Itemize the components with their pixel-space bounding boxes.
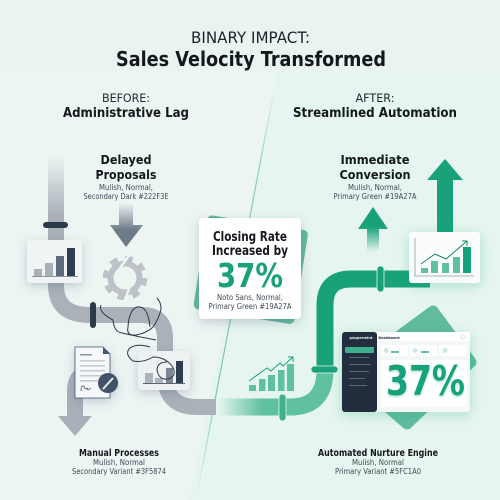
- text: delayed proposals: Secondary Dark #222F3E: [84, 192, 169, 201]
- dashboard: [342, 332, 470, 412]
- chart card upper left: [27, 240, 82, 283]
- callout: closing rate: Increased by: [212, 243, 288, 259]
- text: immediate conversion: Conversion: [340, 167, 410, 182]
- icon: broken gear: [106, 254, 144, 302]
- text: delayed proposals: Mulish, Normal,: [99, 183, 153, 192]
- title: BINARY IMPACT:: [191, 28, 310, 47]
- callout: closing rate: Primary Green #19A27A: [208, 302, 292, 311]
- text: delayed proposals: Delayed: [100, 152, 152, 167]
- text: immediate conversion: [334, 152, 417, 201]
- text: automated nurture engine: Primary Variant #5FC1A0: [335, 467, 421, 476]
- pipe clamp middle: [90, 302, 96, 328]
- icon: signed document: [75, 347, 118, 398]
- text: manual processes: Mulish, Normal: [93, 458, 145, 467]
- text: immediate conversion: Immediate: [340, 152, 410, 167]
- text: delayed proposals: Proposals: [96, 167, 156, 182]
- text: manual processes: Manual Processes: [79, 448, 159, 459]
- title: Sales Velocity Transformed: [116, 47, 386, 71]
- text: automated nurture engine: [318, 448, 438, 476]
- pipe clamp upper: [43, 222, 68, 228]
- text: immediate conversion: Primary Green #19A27A: [334, 192, 417, 201]
- dashboard header: Dashboard: [378, 336, 400, 340]
- arrow: up small: [358, 207, 388, 252]
- before pipe: [43, 155, 216, 407]
- pipe clamps: [279, 266, 384, 421]
- chart card upper right: [409, 232, 480, 283]
- arrow: up large: [427, 159, 463, 235]
- title: [116, 28, 386, 71]
- callout: closing rate: 37%: [217, 256, 283, 295]
- heading: after: Streamlined Automation: [293, 106, 457, 121]
- text: automated nurture engine: Mulish, Normal: [352, 458, 404, 467]
- text: automated nurture engine: Automated Nurture Engine: [318, 448, 438, 459]
- after pipe: [218, 266, 430, 421]
- heading: before: Administrative Lag: [63, 106, 189, 121]
- text: manual processes: [72, 448, 166, 476]
- dashboard big number: 37%: [386, 357, 465, 405]
- heading: after: [293, 91, 457, 121]
- callout: closing rate: Closing Rate: [213, 229, 287, 245]
- heading: before: [63, 91, 189, 121]
- chart card lower left: [138, 351, 190, 390]
- diamond behind dashboard: [349, 311, 471, 424]
- callout: closing rate: [193, 215, 309, 325]
- text: delayed proposals: [84, 152, 169, 201]
- text: immediate conversion: Mulish, Normal,: [348, 183, 402, 192]
- divider line: [196, 85, 275, 500]
- arrow: down to manual processes: [58, 365, 110, 436]
- callout: closing rate: Noto Sans, Normal,: [217, 293, 283, 302]
- heading: after: AFTER:: [356, 91, 394, 105]
- arrow: down into gear: [110, 203, 143, 247]
- heading: before: BEFORE:: [102, 91, 150, 105]
- dashboard main panel: [381, 360, 467, 407]
- icon: pen badge: [98, 373, 118, 393]
- mini growth chart: [249, 357, 294, 391]
- dashboard sidebar: peppermint: [349, 336, 373, 340]
- tangled wires: [100, 298, 174, 379]
- dashboard stat cards: [381, 345, 467, 356]
- text: manual processes: Secondary Variant #3F5874: [72, 467, 166, 476]
